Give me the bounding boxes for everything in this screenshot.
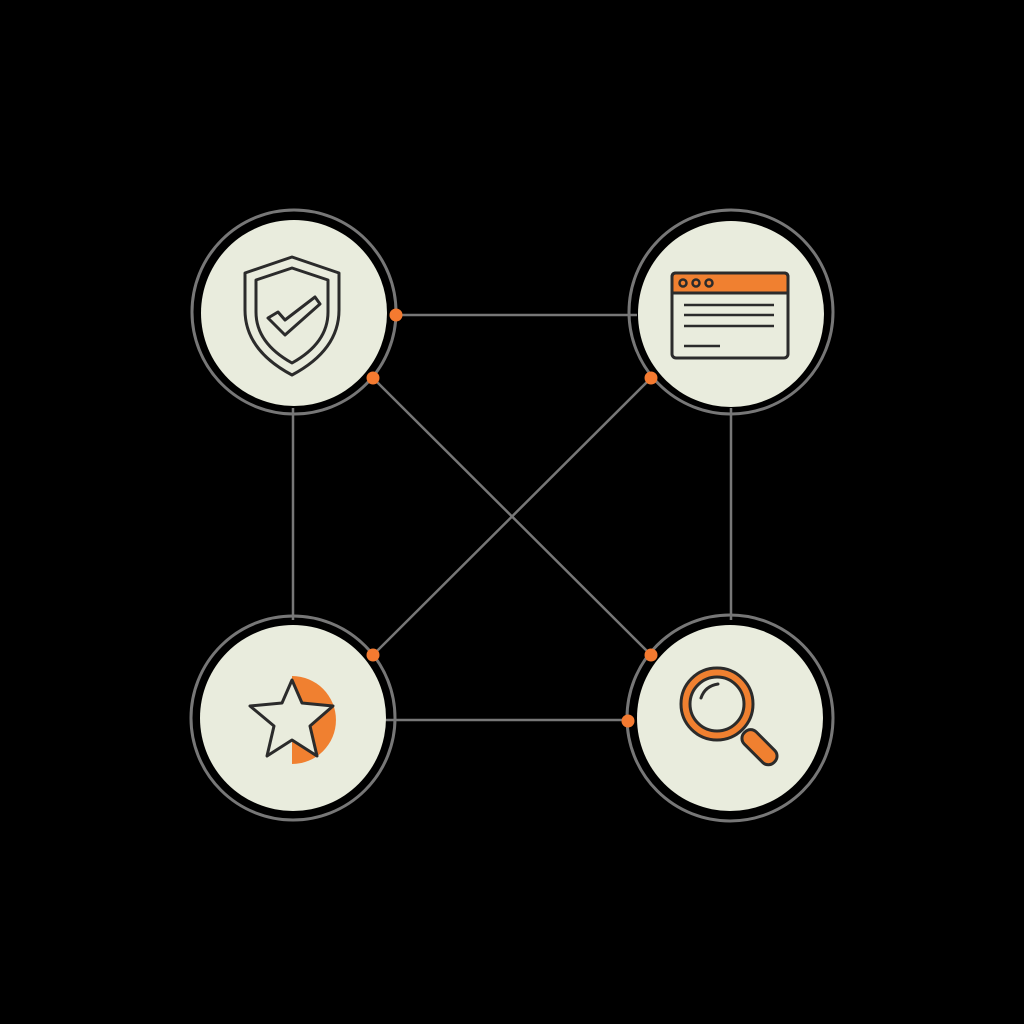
connector lines — [293, 315, 731, 720]
icon: star with orange half circle — [250, 676, 336, 764]
icon: magnifier — [681, 668, 780, 768]
node: browser — [629, 210, 833, 414]
connector dots — [366, 308, 658, 728]
icon: browser window — [672, 273, 788, 358]
node: star — [191, 616, 395, 820]
node: search — [627, 615, 833, 821]
node: shield — [192, 210, 396, 414]
icon: shield check — [245, 257, 339, 375]
